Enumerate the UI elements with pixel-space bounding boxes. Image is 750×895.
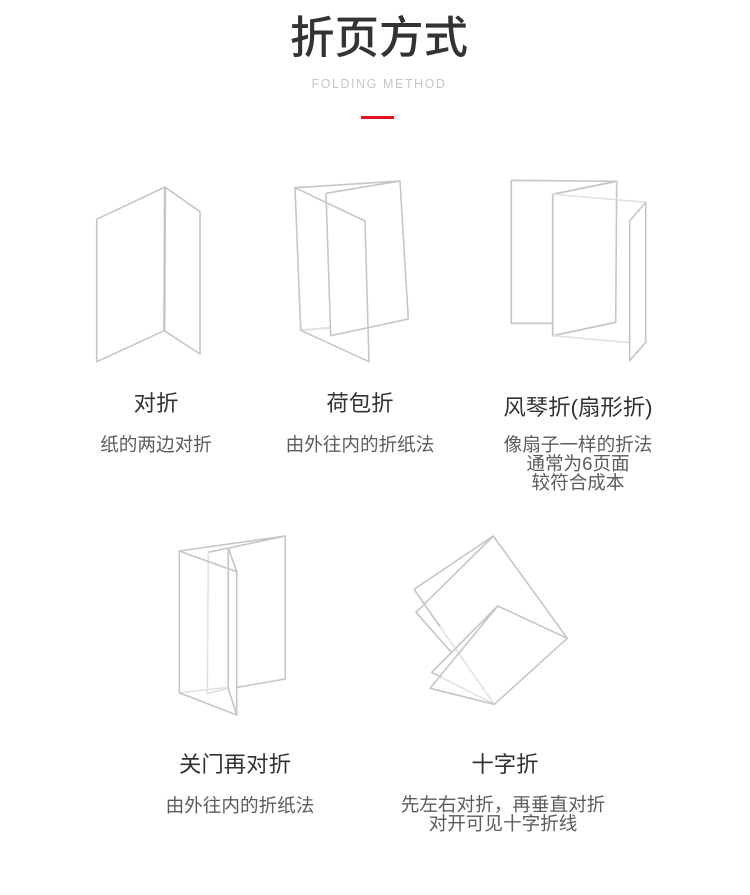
description: cross fold: 对开可见十字折线: [429, 813, 577, 834]
description: cross fold: 先左右对折，再垂直对折: [401, 794, 605, 815]
description: accordion fold: [504, 434, 652, 493]
description: gate fold: 由外往内的折纸法: [166, 795, 314, 816]
icon: wallet fold: [295, 181, 408, 362]
description: cross fold: [401, 794, 605, 834]
icon: half fold: [97, 187, 200, 362]
label: wallet fold: 荷包折: [326, 391, 394, 416]
description: accordion fold: 较符合成本: [532, 472, 624, 493]
description: accordion fold: 通常为6页面: [526, 453, 630, 474]
icon: accordion fold: [511, 180, 646, 361]
icon: gate fold: [179, 536, 285, 715]
description: accordion fold: 像扇子一样的折法: [504, 434, 652, 455]
title: 折页方式: [290, 14, 468, 63]
label: gate fold: 关门再对折: [179, 752, 291, 777]
icon: cross fold: [414, 536, 567, 704]
subtitle: FOLDING METHOD: [312, 77, 446, 91]
description: half fold: 纸的两边对折: [100, 434, 212, 455]
red accent bar: [361, 116, 394, 119]
label: half fold: 对折: [134, 391, 178, 416]
label: cross fold: 十字折: [471, 752, 539, 777]
description: wallet fold: 由外往内的折纸法: [286, 434, 434, 455]
label: accordion fold: 风琴折(扇形折): [503, 395, 653, 420]
